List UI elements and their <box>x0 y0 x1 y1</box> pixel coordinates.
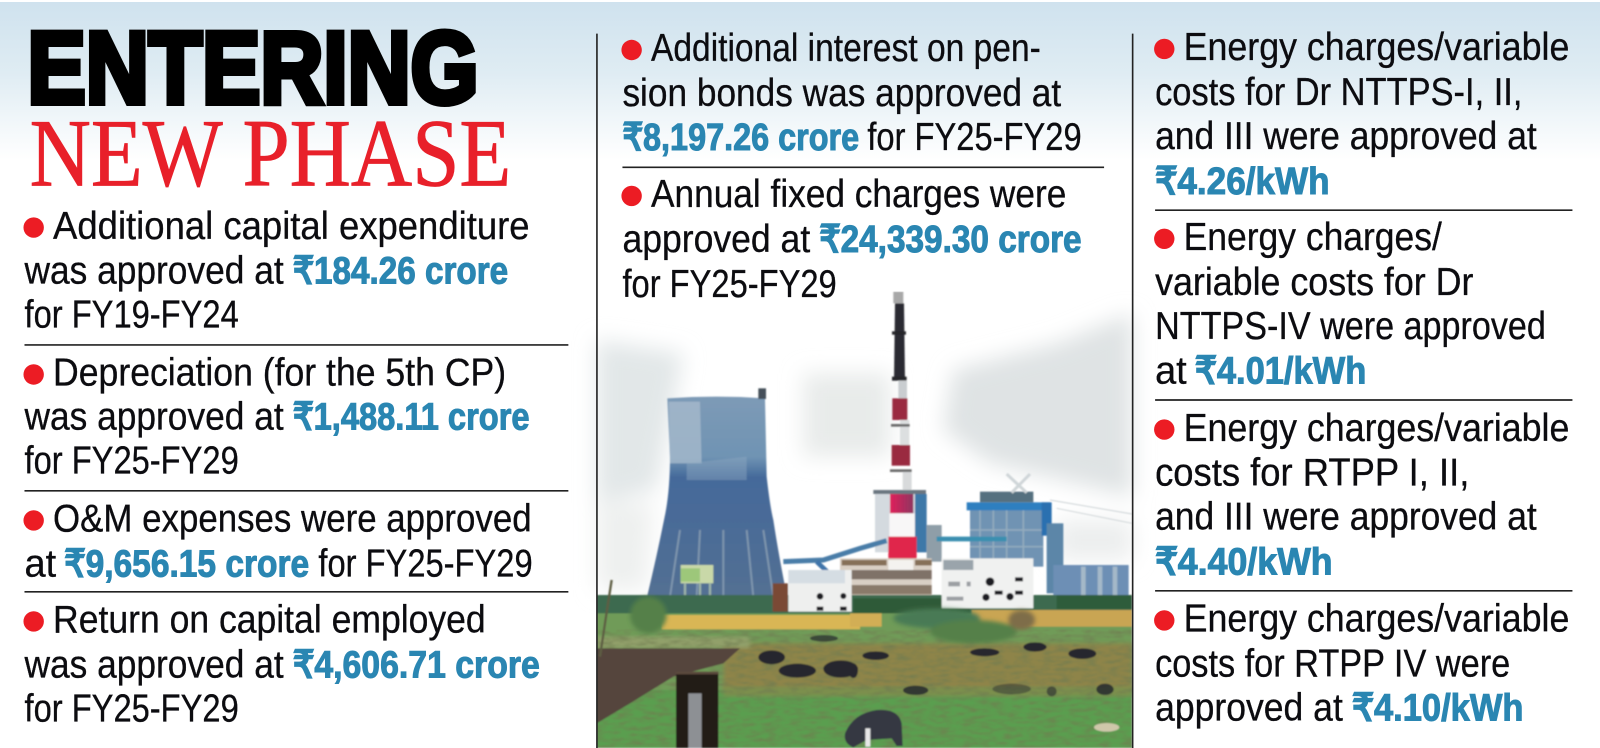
item: return on capital: ₹4,606.71 crore <box>293 644 540 686</box>
item: RTPP IV energy charges: approved at <box>1155 686 1343 729</box>
item: return on capital: Return on capital employed <box>53 599 486 642</box>
item: capital expenditure: was approved at <box>24 250 284 293</box>
item: capital expenditure: ₹184.26 crore <box>293 250 508 292</box>
brown building <box>840 558 932 595</box>
heading: ENTERING: ENTERING <box>28 11 479 125</box>
cooling tower <box>647 388 787 610</box>
plant base <box>773 583 788 612</box>
item: NTTPS I-III energy charges: Energy charges/variable <box>1184 26 1569 69</box>
item: annual fixed charges: Annual fixed charges were <box>651 173 1066 216</box>
item: pension bonds interest: Additional interest on pen- <box>651 27 1041 70</box>
item: depreciation: ₹1,488.11 crore <box>293 396 530 438</box>
item: pension bonds interest: sion bonds was approved at <box>622 72 1061 115</box>
item: depreciation: Depreciation (for the 5th CP) <box>53 352 506 395</box>
item: pension bonds interest: ₹8,197.26 crore <box>622 116 859 158</box>
item: NTTPS-IV energy charges: variable costs for Dr <box>1155 261 1474 304</box>
chimney <box>873 292 927 560</box>
item: NTTPS-IV energy charges: NTTPS-IV were approved <box>1155 305 1546 348</box>
item: RTPP IV energy charges: Energy charges/variable <box>1184 598 1569 641</box>
left column <box>23 205 568 730</box>
item: NTTPS I-III energy charges: and III were approved at <box>1155 115 1537 158</box>
item: capital expenditure: for FY19-FY24 <box>24 294 239 337</box>
item: O&M expenses <box>23 498 533 586</box>
heading: NEW PHASE: NEW PHASE <box>30 101 511 207</box>
field <box>597 580 1132 748</box>
sky clouds <box>597 313 1132 590</box>
post <box>676 672 718 748</box>
item: O&M expenses: for FY25-FY29 <box>318 543 533 586</box>
item: RTPP I-III energy charges: and III were approved at <box>1155 496 1537 539</box>
item: pension bonds interest: for FY25-FY29 <box>867 116 1082 159</box>
item: depreciation: was approved at <box>24 396 284 439</box>
middle column <box>621 27 1104 306</box>
title <box>28 11 511 207</box>
tree line <box>597 595 1132 615</box>
item: depreciation <box>23 352 530 482</box>
item: annual fixed charges: ₹24,339.30 crore <box>819 218 1082 260</box>
item: RTPP IV energy charges: ₹4.10/kWh <box>1352 686 1523 728</box>
photo: thermal power plant <box>597 290 1132 748</box>
item: capital expenditure <box>23 205 530 337</box>
item: pension bonds interest <box>621 27 1082 159</box>
column dividers <box>597 34 1133 748</box>
item: depreciation: for FY25-FY29 <box>24 439 239 482</box>
item: annual fixed charges: approved at <box>622 218 810 261</box>
conveyors <box>937 532 1007 546</box>
item: NTTPS I-III energy charges <box>1154 26 1569 202</box>
item: RTPP I-III energy charges: costs for RTPP I, II, <box>1155 452 1469 495</box>
item: RTPP I-III energy charges: Energy charges/variable <box>1184 407 1569 450</box>
item: return on capital: was approved at <box>24 644 284 687</box>
item: NTTPS I-III energy charges: ₹4.26/kWh <box>1155 160 1330 202</box>
item: annual fixed charges: for FY25-FY29 <box>622 263 837 306</box>
boiler structure <box>927 474 1132 595</box>
item: RTPP I-III energy charges: ₹4.40/kWh <box>1155 540 1333 582</box>
item: RTPP IV energy charges: costs for RTPP IV were <box>1155 643 1510 686</box>
item: O&M expenses: ₹9,656.15 crore <box>64 543 309 585</box>
item: NTTPS I-III energy charges: costs for Dr NTTPS-I, II, <box>1155 71 1522 114</box>
item: NTTPS-IV energy charges: at <box>1155 350 1187 393</box>
item: return on capital: for FY25-FY29 <box>24 687 239 730</box>
item: NTTPS-IV energy charges <box>1154 216 1546 393</box>
item: capital expenditure: Additional capital expenditure <box>53 205 530 248</box>
item: RTPP I-III energy charges <box>1154 407 1569 582</box>
white buildings <box>788 558 1033 612</box>
item: NTTPS-IV energy charges: ₹4.01/kWh <box>1195 350 1366 392</box>
right column <box>1154 26 1572 729</box>
item: O&M expenses: O&M expenses were approved <box>53 498 532 541</box>
item: annual fixed charges <box>621 173 1082 306</box>
item: RTPP IV energy charges <box>1154 598 1569 729</box>
item: O&M expenses: at <box>24 543 56 586</box>
item: return on capital <box>23 599 540 730</box>
buffaloes <box>758 635 1114 747</box>
item: NTTPS-IV energy charges: Energy charges/ <box>1184 216 1442 259</box>
